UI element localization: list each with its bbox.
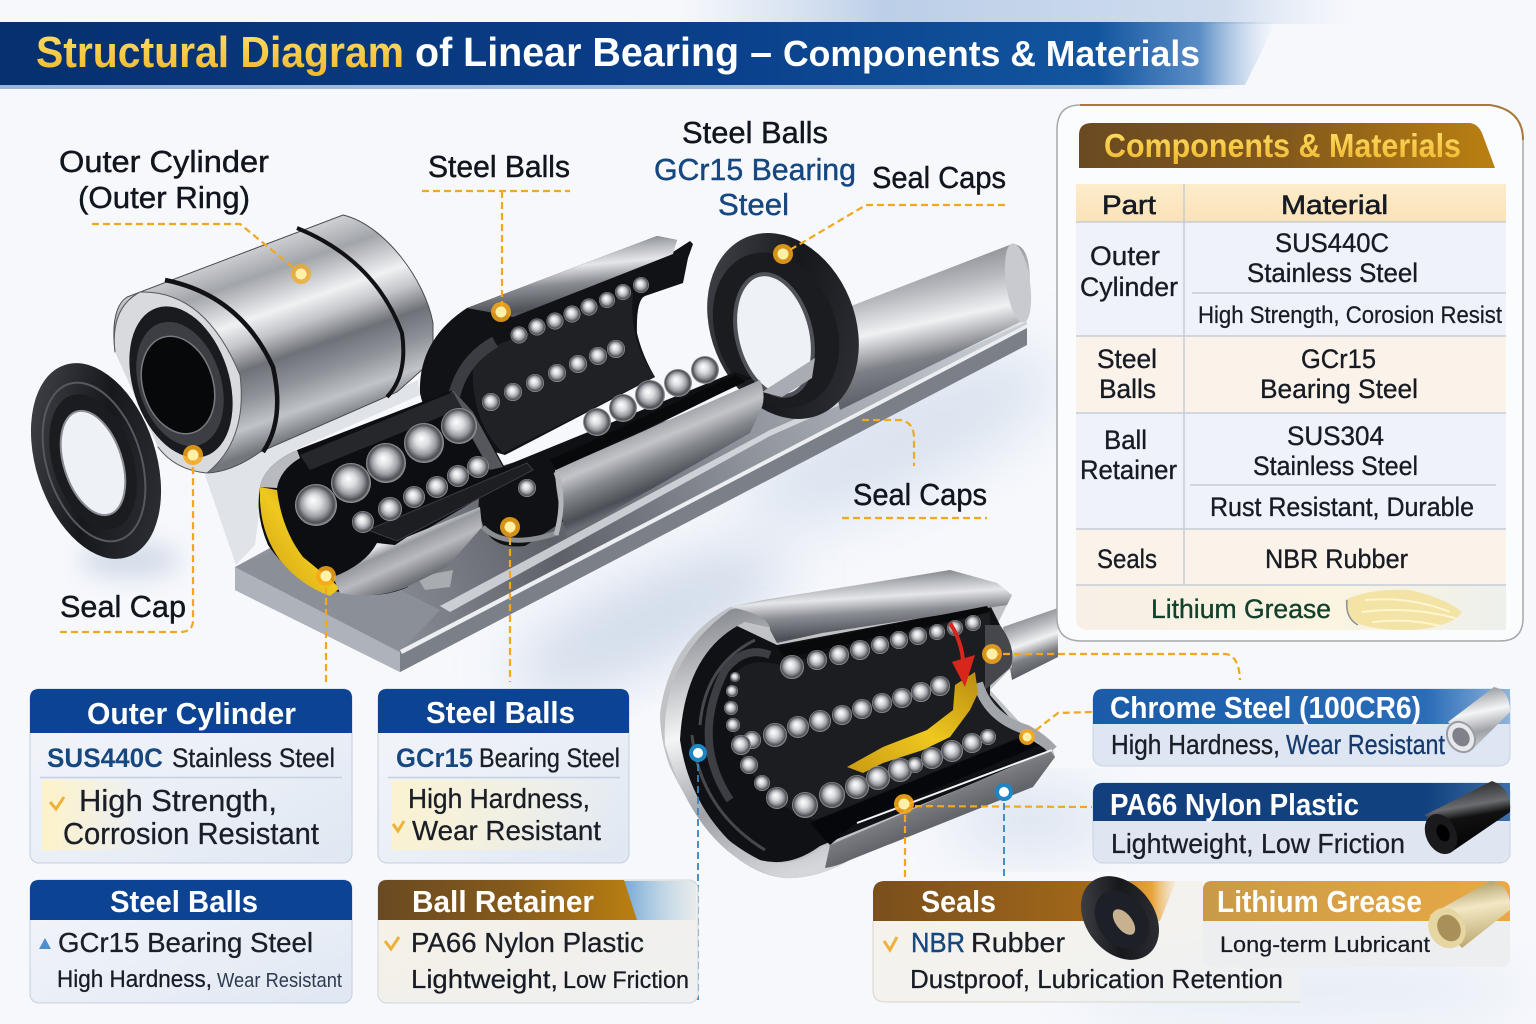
card: outer cylinder: SUS440C [47,743,163,773]
table text: Balls [1099,374,1156,404]
card: seals: Rubber [971,927,1065,958]
inner chamber [728,612,1025,820]
large balls [295,408,477,526]
card: ball retainer: PA66 Nylon Plastic [411,927,644,958]
card: chrome steel [1093,687,1510,766]
table text: Outer [1090,241,1160,271]
table text: Part [1102,190,1157,220]
table text: Stainless Steel [1247,258,1418,288]
top shell [730,570,1012,643]
labels: GCr15 Bearing [654,152,856,187]
steel shaft [820,242,1035,410]
outer cylinder [111,215,433,565]
table text: High Strength, Corosion Resist [1198,302,1502,329]
card: steel balls bottom: Steel Balls [110,884,258,919]
labels: Steel [718,187,789,222]
callout dots [183,244,1035,814]
card: ball retainer [378,880,698,1003]
card: PA66 nylon: PA66 Nylon Plastic [1110,787,1359,822]
bottom ball row [792,729,996,818]
silver rim highlights [665,608,850,878]
callout lines [60,191,1240,1000]
lower ball row [583,356,719,436]
bearing cutaway detail [660,570,1058,878]
grease [260,487,340,596]
front cut section with large balls [259,390,533,596]
icon: chrome tube [1441,687,1510,758]
left ball arc [724,672,788,809]
middle ball row [482,340,625,411]
card: seals: Dustproof, Lubrication Retention [910,964,1283,994]
card: steel balls top [378,689,629,863]
labels: Seal Caps [853,477,987,512]
base plate and rail [235,318,1027,672]
card: steel balls bottom: GCr15 Bearing Steel [58,927,313,958]
seal cap exploded right [680,210,886,442]
table text: Seals [1097,544,1157,574]
card: seals: NBR [911,927,965,958]
card: outer cylinder: Stainless Steel [172,743,335,773]
card: chrome steel: Wear Resistant [1286,729,1445,760]
card: outer cylinder: Outer Cylinder [87,696,296,731]
table text: Steel [1097,344,1157,374]
card: chrome steel: High Hardness, [1111,729,1280,760]
title text: Structural Diagram [36,28,404,77]
icon: nbr seal [1065,861,1175,975]
card: steel balls top: GCr15 [396,743,473,773]
card: outer cylinder: High Strength, [79,783,277,818]
cutaway body [660,570,1055,878]
card: steel balls bottom [30,880,352,1003]
labels: Seal Cap [60,589,186,624]
silver cover [333,507,482,595]
top ball row [780,615,981,679]
card: ball retainer: Lightweight, [411,964,558,994]
labels: Steel Balls [428,149,570,184]
table text: Lithium Grease [1151,594,1331,624]
card: seals [873,861,1300,1002]
labels: Steel Balls [682,115,828,150]
card: PA66 nylon [1093,781,1510,863]
table text: SUS304 [1287,421,1384,451]
table text: SUS440C [1275,228,1389,258]
card: lithium grease: Long-term Lubricant [1220,932,1430,957]
table text: NBR Rubber [1265,544,1408,574]
card: steel balls top: High Hardness, [408,783,590,814]
card: lithium grease: Lithium Grease [1217,884,1422,919]
upper half shell with balls [420,236,693,455]
table text: Rust Resistant, Durable [1210,492,1474,522]
table text: Ball [1104,425,1147,455]
lower silver half sleeve [479,356,764,546]
labels [59,115,1006,624]
title banner: Components & Materials [783,33,1200,74]
table text: GCr15 [1301,344,1376,374]
card: chrome steel: Chrome Steel (100CR6) [1110,690,1421,725]
icon: cream tube [1421,881,1510,955]
card: lithium grease [1203,881,1510,967]
card: seals: Seals [921,884,996,919]
icon: black tube [1419,781,1510,859]
icon: grease sample [1345,590,1462,630]
card: steel balls top: Steel Balls [426,695,575,730]
table text: Bearing Steel [1260,374,1418,404]
labels: Seal Caps [872,160,1006,195]
card: steel balls top: Bearing Steel [479,743,620,773]
card: ball retainer: Ball Retainer [412,884,594,919]
labels: (Outer Ring) [78,180,250,215]
middle ball row [763,676,950,747]
card: outer cylinder [30,689,352,863]
card: PA66 nylon: Lightweight, Low Friction [1111,828,1405,859]
panel: components and materials table [1057,105,1523,641]
cylinder front face [111,292,251,473]
lower silver strip [810,738,1040,845]
table text: Stainless Steel [1253,451,1418,481]
table text: Retainer [1080,455,1177,485]
labels: Outer Cylinder [59,144,269,179]
title banner: of Linear Bearing – [415,29,772,75]
card: steel balls bottom: High Hardness, [57,966,212,993]
table rows [1076,184,1506,630]
table text: Material [1281,190,1388,220]
card: outer cylinder: Corrosion Resistant [63,816,319,851]
title banner [0,0,1360,89]
table text: Cylinder [1080,272,1178,302]
card: ball retainer: Low Friction [563,967,689,994]
red arrow [950,623,975,687]
grease [847,672,978,773]
table heading: Components & Materials [1104,127,1461,164]
table text [1080,190,1502,624]
upper ball row [510,277,649,344]
card: steel balls bottom: Wear Resistant [217,970,342,992]
small balls [352,456,489,533]
card: steel balls top: Wear Resistant [412,815,601,846]
seal cap exploded left [8,346,184,576]
